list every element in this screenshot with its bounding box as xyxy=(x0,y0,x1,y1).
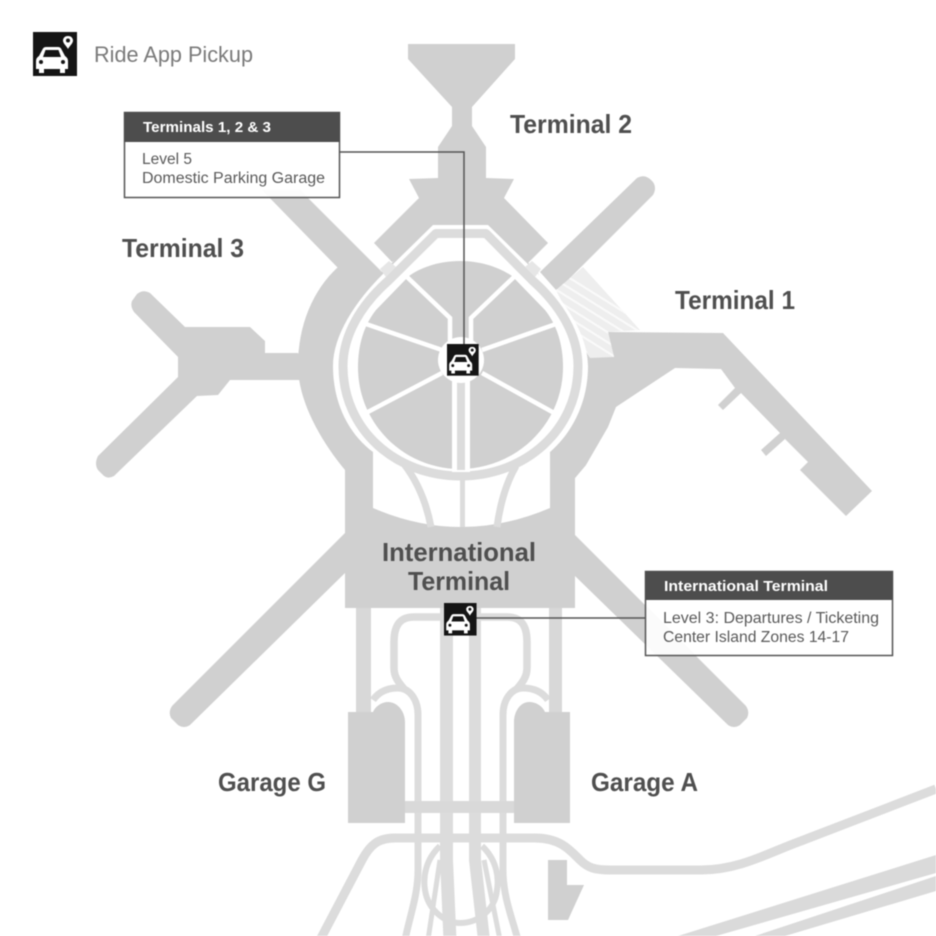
callout body xyxy=(142,151,325,187)
label: Garage A: Garage A xyxy=(591,767,698,797)
garage G xyxy=(348,702,405,823)
domestic parking garage wedges xyxy=(358,261,563,472)
Terminal 3 building xyxy=(96,291,310,478)
white roadway band and courtyard xyxy=(333,225,588,527)
connector: terminals callout to central pickup xyxy=(340,152,464,346)
International southwest pier xyxy=(170,533,345,727)
legend label: Ride App Pickup xyxy=(94,42,253,67)
rental building xyxy=(548,860,584,920)
garage A xyxy=(514,702,570,823)
label: International Terminal: Terminal xyxy=(408,566,510,596)
label: International Terminal xyxy=(382,537,536,596)
callout body: Center Island Zones 14-17 xyxy=(663,629,849,646)
label: Terminal 1: Terminal 1 xyxy=(675,285,795,315)
label: Terminal 3: Terminal 3 xyxy=(122,233,244,263)
callout body: Level 5 xyxy=(142,151,192,168)
Terminal 3 northeast arm xyxy=(262,190,382,272)
central terminal ring and International Terminal body xyxy=(298,225,590,608)
connector: international callout to pickup xyxy=(476,617,646,619)
callout header xyxy=(645,571,893,600)
icon: international pickup xyxy=(444,603,477,636)
icon: central pickup xyxy=(447,344,479,376)
legend xyxy=(33,32,253,76)
callout: International Terminal: International Terminal xyxy=(664,579,828,595)
callout body: Level 3: Departures / Ticketing xyxy=(663,610,879,627)
callout body: Domestic Parking Garage xyxy=(142,170,325,187)
label: International Terminal: International xyxy=(382,537,536,567)
ring tabs xyxy=(380,261,541,277)
label: Terminal 2: Terminal 2 xyxy=(510,109,632,139)
terminal buildings xyxy=(96,44,872,727)
label: Garage G: Garage G xyxy=(218,767,326,797)
inner loop road xyxy=(343,234,578,527)
callout body xyxy=(663,610,879,646)
callout: Terminals 1, 2 and 3: Terminals 1, 2 & 3 xyxy=(143,120,271,136)
Terminal 1 building xyxy=(570,332,872,516)
callout header xyxy=(124,112,340,142)
callout: International Terminal xyxy=(645,571,893,656)
roadways xyxy=(320,608,936,936)
hatched connector xyxy=(558,268,639,358)
Terminal 2 building xyxy=(374,44,548,263)
icon: legend car pickup xyxy=(33,32,77,76)
Terminal 2 east arm xyxy=(540,176,655,290)
callout: Terminals 1, 2 and 3 xyxy=(124,112,340,198)
International southeast pier xyxy=(575,535,748,727)
